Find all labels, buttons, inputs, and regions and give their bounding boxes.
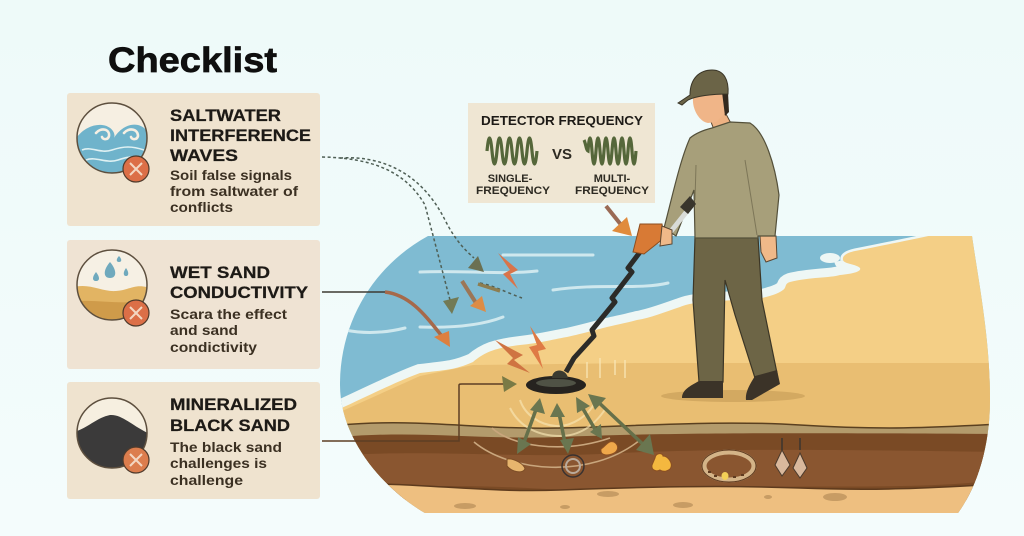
icon: x badge: [123, 300, 149, 326]
nugget: [601, 442, 618, 455]
description: and sand: [170, 323, 238, 338]
person shadow: [661, 390, 805, 402]
boots: [682, 370, 780, 400]
callout: detector frequency: DETECTOR FREQUENCY: [481, 114, 644, 128]
arrow: black sand: [322, 376, 517, 441]
heading: WET SAND: [170, 263, 270, 282]
description: challenges is: [170, 456, 267, 471]
description: Soil false signals: [170, 168, 292, 183]
cap: [678, 70, 728, 105]
arm fold line: [695, 160, 757, 235]
description: condictivity: [170, 340, 258, 355]
icon: x badge: [123, 447, 149, 473]
legs: [693, 237, 777, 382]
description: [170, 168, 299, 215]
detection arrowheads: [517, 394, 654, 455]
detection arrows: [522, 398, 648, 449]
callout: detector frequency: [468, 103, 655, 203]
description: [170, 307, 288, 355]
description: [170, 440, 282, 488]
hair: [722, 92, 729, 116]
search coil: [526, 376, 586, 394]
icon: wet sand: [74, 250, 150, 325]
callout: detector frequency: SINGLE-: [488, 173, 533, 185]
callout: detector frequency: FREQUENCY: [575, 185, 650, 197]
panel: wet sand: [67, 240, 320, 369]
control box: [633, 224, 664, 254]
heading: SALTWATER: [170, 106, 281, 125]
callout: detector frequency: VS: [552, 146, 572, 163]
heading: INTERFERENCE: [170, 126, 311, 145]
interference arrows: [462, 281, 522, 312]
nugget: [507, 459, 525, 472]
heading: [170, 106, 311, 165]
heading: MINERALIZED: [170, 395, 297, 414]
lightning bolts: [495, 253, 546, 373]
heading: [170, 263, 309, 302]
left hand: [760, 236, 777, 262]
detection ripples: [510, 358, 625, 436]
underground signal arcs: [474, 428, 640, 467]
arrow: wet sand: [322, 292, 450, 347]
description: challenge: [170, 473, 244, 488]
callout: detector frequency: FREQUENCY: [476, 185, 551, 197]
arrow: frequency to detector: [606, 206, 632, 236]
icon: black sand: [74, 398, 150, 470]
metal detector: [526, 196, 696, 394]
panel: saltwater interference: [67, 93, 320, 226]
wave: single frequency: [487, 138, 537, 164]
description: from saltwater of: [170, 184, 299, 199]
heading: [170, 395, 297, 435]
neck: [708, 114, 733, 135]
description: The black sand: [170, 440, 282, 455]
description: conflicts: [170, 200, 233, 215]
panel: black sand: [67, 382, 320, 499]
earrings: [775, 438, 807, 478]
torso: [664, 122, 779, 238]
hand: [660, 226, 672, 246]
heading: BLACK SAND: [170, 416, 290, 435]
face: [693, 90, 727, 123]
gold cluster: [652, 454, 671, 471]
heading: WAVES: [170, 146, 238, 165]
wave: multi frequency: [584, 138, 636, 164]
bracelet: [702, 450, 756, 482]
heading: CONDUCTIVITY: [170, 283, 309, 302]
arrow: saltwater dashed: [322, 157, 484, 314]
description: Scara the effect: [170, 307, 288, 322]
title: Checklist: [108, 41, 277, 80]
callout: detector frequency: MULTI-: [594, 173, 631, 185]
ring: [562, 455, 584, 477]
icon: waves: [76, 102, 148, 174]
person: [664, 70, 780, 400]
shaft: [566, 252, 640, 372]
treasures: [507, 438, 807, 482]
beach scene: [340, 236, 990, 513]
icon: x badge: [123, 156, 149, 182]
